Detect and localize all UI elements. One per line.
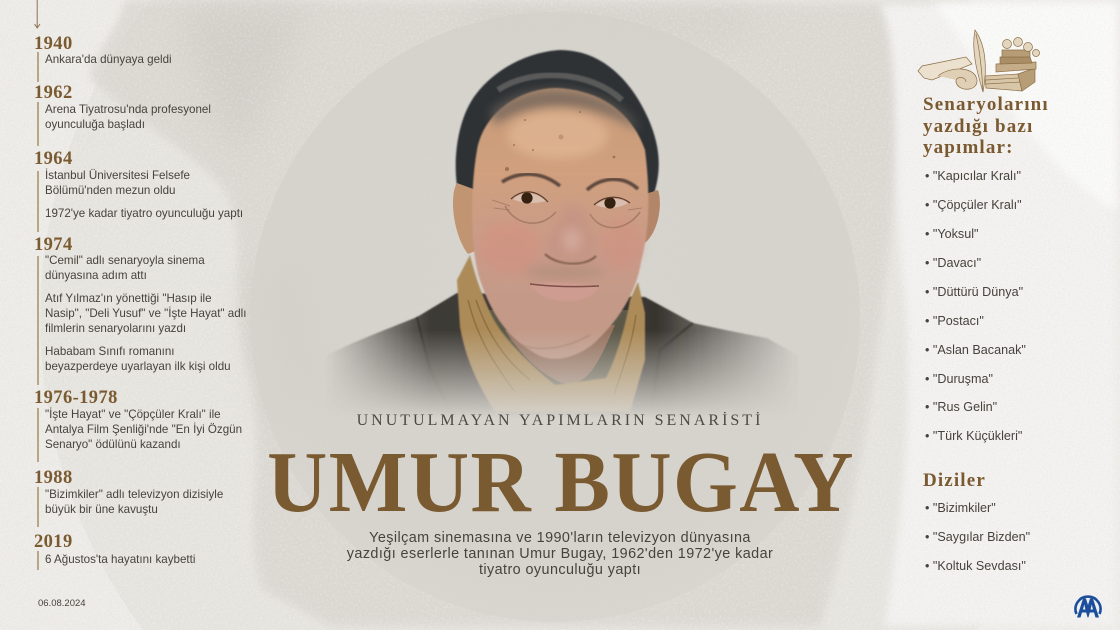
timeline entry: 2019: 2019 — [34, 532, 73, 552]
date: 06.08.2024 — [38, 598, 86, 609]
timeline entry: 1962 — [34, 83, 211, 146]
chin line — [510, 335, 590, 348]
description paragraph: Yeşilçam sinemasına ve 1990'ların televizyon dünyasına — [369, 530, 751, 546]
icon: scroll, quill and books — [918, 29, 1040, 92]
background circle behind portrait — [250, 12, 860, 622]
timeline entry: 2019: 6 Ağustos'ta hayatını kaybetti — [45, 553, 195, 566]
timeline entry: 1988 — [34, 468, 223, 527]
timeline entry: 1964: 1964 — [34, 149, 73, 169]
list: film scripts: • "Çöpçüler Kralı" — [925, 198, 1022, 212]
timeline entry: 1940 — [34, 34, 172, 82]
timeline entry: 2019 — [34, 532, 195, 570]
timeline entry: 1974: Atıf Yılmaz'ın yönettiği "Hasıp ile — [45, 292, 212, 305]
list: film scripts: • "Düttürü Dünya" — [925, 285, 1023, 299]
timeline entry: 1976-1978: "İşte Hayat" ve "Çöpçüler Kralı" ile — [45, 408, 221, 421]
brows — [502, 174, 560, 186]
timeline entry: 1976-1978: 1976-1978 — [34, 388, 118, 408]
list: film scripts: • "Postacı" — [925, 314, 984, 328]
face — [472, 88, 648, 359]
timeline entry: 1976-1978: Senaryo" ödülünü kazandı — [45, 438, 181, 451]
ears — [452, 183, 475, 254]
mouth — [530, 283, 599, 301]
timeline entry: 1976-1978: Antalya Film Şenliği'nde "En İyi Özgün — [45, 423, 242, 436]
heading: series: Diziler — [923, 470, 986, 491]
portrait of Umur Bugay — [333, 49, 789, 414]
timeline entry: 1974: "Cemil" adlı senaryoyla sinema — [45, 254, 205, 267]
subtitle: UNUTULMAYAN YAPIMLARIN SENARİSTİ — [357, 412, 763, 429]
heading: scripts list: Senaryolarını — [923, 94, 1049, 115]
timeline entry: 1962: oyunculuğa başladı — [45, 118, 145, 131]
eye right — [594, 197, 630, 209]
heading: scripts list — [923, 94, 1049, 158]
forehead blemishes — [505, 111, 615, 171]
list: series: • "Saygılar Bizden" — [925, 530, 1030, 544]
scarf — [457, 255, 645, 412]
timeline entry: 1974: dünyasına adım attı — [45, 269, 147, 282]
list: series: • "Koltuk Sevdası" — [925, 559, 1026, 573]
timeline entry: 1964: 1972'ye kadar tiyatro oyunculuğu yaptı — [45, 207, 243, 220]
upper lip shadow — [530, 264, 599, 279]
timeline entry: 1974: Hababam Sınıfı romanını — [45, 345, 175, 358]
description paragraph — [346, 530, 773, 578]
timeline entry: 1964: İstanbul Üniversitesi Felsefe — [45, 169, 190, 182]
description paragraph: tiyatro oyunculuğu yaptı — [479, 562, 641, 578]
timeline entry: 1940: Ankara'da dünyaya geldi — [45, 53, 172, 66]
eye left — [511, 192, 548, 204]
heading: scripts list: yapımlar: — [923, 137, 1014, 158]
list: series — [925, 501, 1030, 573]
timeline entry: 1974 — [34, 235, 246, 385]
jacket — [333, 292, 789, 414]
timeline entry: 1962: Arena Tiyatrosu'nda profesyonel — [45, 103, 211, 116]
shirt and neck — [488, 310, 628, 384]
thin hair over scalp — [490, 89, 640, 132]
timeline entry: 1974: beyazperdeye uyarlayan ilk kişi oldu — [45, 360, 231, 373]
list: film scripts: • "Kapıcılar Kralı" — [925, 169, 1021, 183]
timeline entry: 1974: 1974 — [34, 235, 73, 255]
timeline entry: 1988: büyük bir üne kavuştu — [45, 503, 158, 516]
timeline entry: 1974: Nasip", "Deli Yusuf" ve "İşte Hayat" adlı — [45, 307, 246, 320]
jacket lapels — [416, 316, 694, 362]
cheeks — [480, 222, 540, 274]
timeline entry: 1964 — [34, 149, 243, 232]
description paragraph: yazdığı eserlerle tanınan Umur Bugay, 1962'den 1972'ye kadar — [347, 546, 773, 562]
forehead highlight — [508, 111, 608, 159]
timeline entry: 1962: 1962 — [34, 83, 73, 103]
list: series: • "Bizimkiler" — [925, 501, 996, 515]
list: film scripts: • "Rus Gelin" — [925, 400, 997, 414]
timeline arrow — [34, 0, 40, 29]
list: film scripts: • "Aslan Bacanak" — [925, 343, 1026, 357]
heading: scripts list: yazdığı bazı — [923, 116, 1033, 136]
timeline entry: 1976-1978 — [34, 388, 242, 462]
list: film scripts: • "Yoksul" — [925, 227, 978, 241]
eye bags and wrinkles — [505, 206, 556, 223]
timeline entry: 1988: 1988 — [34, 468, 73, 488]
nose — [545, 205, 596, 261]
list: film scripts: • "Davacı" — [925, 256, 981, 270]
timeline entry: 1964: Bölümü'nden mezun oldu — [45, 184, 175, 197]
timeline entry: 1988: "Bizimkiler" adlı televizyon dizisiyle — [45, 488, 223, 501]
list: film scripts — [925, 169, 1026, 443]
timeline entry: 1940: 1940 — [34, 34, 73, 54]
list: film scripts: • "Türk Küçükleri" — [925, 429, 1022, 443]
logo: AA — [1074, 595, 1102, 618]
hair — [454, 49, 660, 194]
list: film scripts: • "Duruşma" — [925, 372, 993, 386]
timeline entry: 1974: filmlerin senaryolarını yazdı — [45, 322, 186, 335]
main title: UMUR BUGAY — [267, 433, 855, 530]
